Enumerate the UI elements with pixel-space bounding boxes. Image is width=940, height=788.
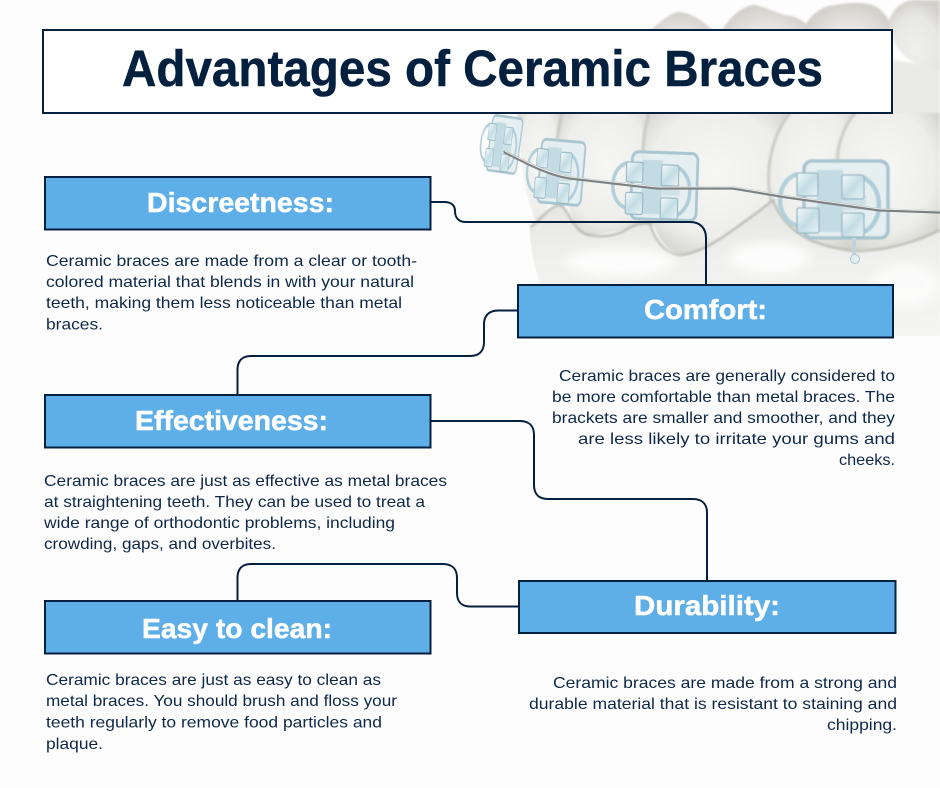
heading: Effectiveness <box>45 395 430 448</box>
connector: Discreetness to Comfort <box>431 202 706 284</box>
heading: Durability <box>519 581 896 633</box>
text: Effectiveness description: at straightening teeth. They can be used to treat a <box>44 494 425 511</box>
tooth grooves <box>555 113 855 203</box>
gum <box>530 200 940 336</box>
text: Comfort description: brackets are smaller and smoother, and they <box>552 410 895 427</box>
text: Discreetness description: colored material that blends in with your natural <box>46 274 414 291</box>
text: Comfort description <box>552 368 895 469</box>
lower teeth <box>517 113 940 255</box>
bracket 3 <box>612 151 698 221</box>
text: Comfort description: be more comfortable than metal braces. The <box>552 389 895 406</box>
upper teeth <box>640 0 940 115</box>
panel: Effectiveness <box>43 395 447 553</box>
heading: Discreetness <box>45 177 430 230</box>
archwire <box>505 151 940 212</box>
bracket 4 with hook <box>780 161 888 264</box>
bracket 2 <box>524 138 586 206</box>
heading: Comfort <box>518 285 893 338</box>
bracket 1 <box>477 114 523 174</box>
heading: Comfort: Comfort: <box>644 294 767 325</box>
text: Durability description: chipping. <box>827 717 897 734</box>
illustration: teeth with ceramic braces <box>477 0 940 336</box>
heading: Effectiveness: Effectiveness: <box>135 405 328 436</box>
panel: Easy to clean <box>45 601 430 753</box>
text: Comfort description: cheeks. <box>839 452 895 469</box>
text: Easy to clean description: Ceramic braces are just as easy to clean as <box>46 672 381 689</box>
text: Comfort description: are less likely to irritate your gums and <box>578 431 895 448</box>
connector: Effectiveness to Durability <box>431 421 707 580</box>
heading: Durability: Durability: <box>634 590 780 621</box>
text: Easy to clean description <box>46 672 397 753</box>
text: Easy to clean description: plaque. <box>46 736 103 753</box>
heading: Easy to clean <box>45 601 430 654</box>
heading: Discreetness: Discreetness: <box>147 187 334 218</box>
text: Easy to clean description: teeth regularly to remove food particles and <box>46 714 382 732</box>
text: Effectiveness description: Ceramic braces are just as effective as metal braces <box>44 473 447 490</box>
text: Discreetness description: teeth, making them less noticeable than metal <box>46 295 402 312</box>
text: Effectiveness description: crowding, gaps, and overbites. <box>44 536 276 553</box>
connector: Comfort to Effectiveness <box>238 310 517 394</box>
text: Discreetness description: Ceramic braces are made from a clear or tooth- <box>46 253 417 270</box>
text: Durability description: Ceramic braces are made from a strong and <box>553 675 897 692</box>
text: Discreetness description <box>46 253 417 334</box>
text: Comfort description: Ceramic braces are generally considered to <box>559 368 895 385</box>
panel: Discreetness <box>45 177 430 334</box>
text: Durability description: durable material that is resistant to staining and <box>529 696 897 713</box>
text: Effectiveness description: wide range of orthodontic problems, including <box>43 515 395 532</box>
text: Durability description <box>529 675 897 734</box>
title: Advantages of Ceramic Braces <box>122 40 823 97</box>
text: Effectiveness description <box>43 473 447 553</box>
text: Discreetness description: braces. <box>46 316 103 334</box>
title banner <box>43 30 892 113</box>
heading: Easy to clean: Easy to clean: <box>142 613 332 644</box>
connector: Durability to Easy to clean <box>238 564 518 606</box>
text: Easy to clean description: metal braces. You should brush and floss your <box>46 693 397 710</box>
panel: Durability <box>519 581 897 734</box>
panel: Comfort <box>518 285 895 469</box>
